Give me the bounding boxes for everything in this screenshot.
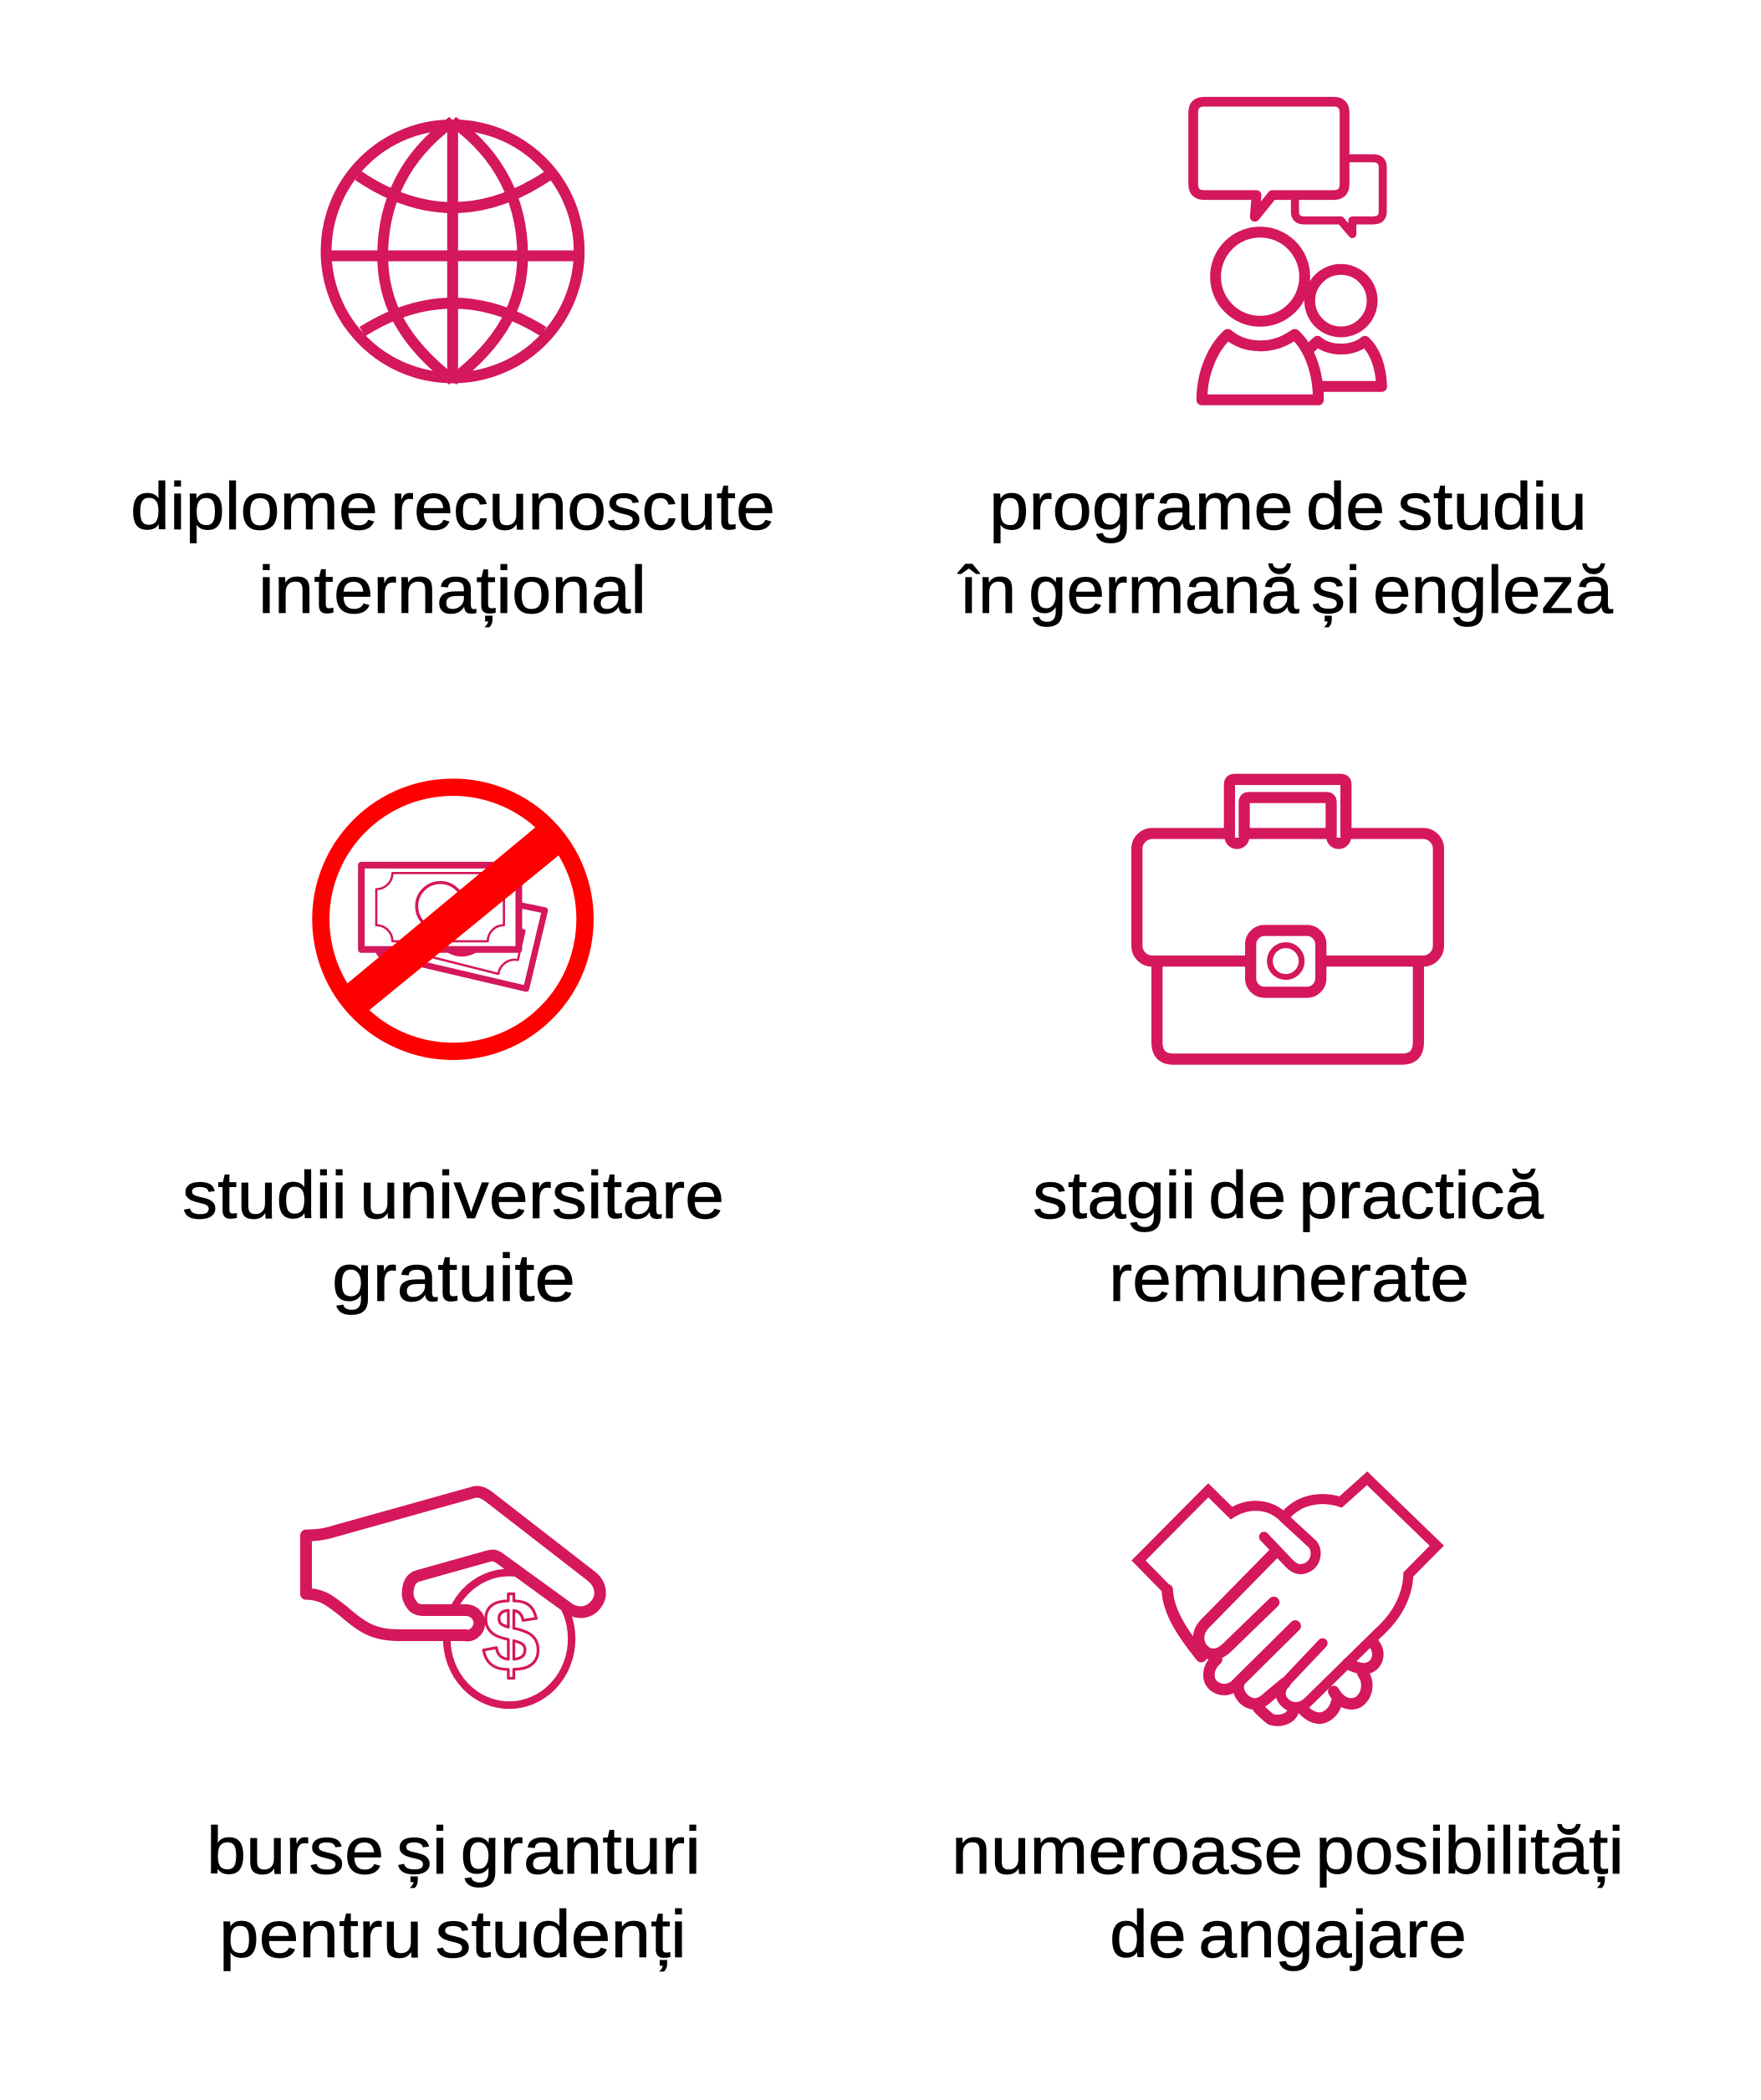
text: burse și granturi pentru studenți xyxy=(207,1813,701,1971)
text: burse și granturi pentru studenți: pentru studenți xyxy=(219,1897,687,1971)
banknotes xyxy=(361,865,545,989)
icon: hand holding a coin xyxy=(306,1491,600,1705)
icon: briefcase xyxy=(1137,779,1438,1059)
panel: free university studies xyxy=(182,788,724,1315)
panel: internationally recognised diplomas xyxy=(130,121,775,627)
text: stagii de practică remunerate: remunerate xyxy=(1109,1241,1469,1315)
text: numeroase posibilități de angajare xyxy=(952,1813,1624,1971)
panel: numerous employment opportunities xyxy=(952,1478,1624,1971)
text: programe de studiu în germană și engleză xyxy=(957,469,1614,627)
icon: globe xyxy=(326,121,579,380)
text: stagii de practică remunerate: stagii de practică xyxy=(1033,1158,1544,1232)
icon: two people with speech bubbles xyxy=(1193,102,1383,400)
text: diplome recunoscute internațional: diplome recunoscute xyxy=(130,469,775,543)
panel: paid internships xyxy=(1033,779,1544,1315)
panel: scholarships and grants xyxy=(207,1491,701,1971)
text: studii universitare gratuite xyxy=(182,1158,724,1315)
icon: hand holding a coin: $ xyxy=(482,1578,539,1693)
text: programe de studiu în germană și engleză: programe de studiu xyxy=(989,469,1587,543)
text: diplome recunoscute internațional xyxy=(130,469,775,627)
icon: banknotes crossed out xyxy=(321,788,585,1052)
text: diplome recunoscute internațional: internațional xyxy=(258,553,646,627)
text: burse și granturi pentru studenți: burse și granturi xyxy=(207,1813,701,1888)
prohibition sign xyxy=(321,788,585,1052)
text: numeroase posibilități de angajare: numeroase posibilități xyxy=(952,1813,1624,1888)
text: numeroase posibilități de angajare: de angajare xyxy=(1110,1897,1467,1971)
text: stagii de practică remunerate xyxy=(1033,1158,1544,1315)
text: studii universitare gratuite: studii universitare xyxy=(182,1158,724,1232)
icon: handshake xyxy=(1139,1478,1437,1720)
panel: study programmes in German and English xyxy=(957,102,1614,627)
text: programe de studiu în germană și engleză: în germană și engleză xyxy=(957,553,1614,627)
text: studii universitare gratuite: gratuite xyxy=(332,1241,575,1315)
